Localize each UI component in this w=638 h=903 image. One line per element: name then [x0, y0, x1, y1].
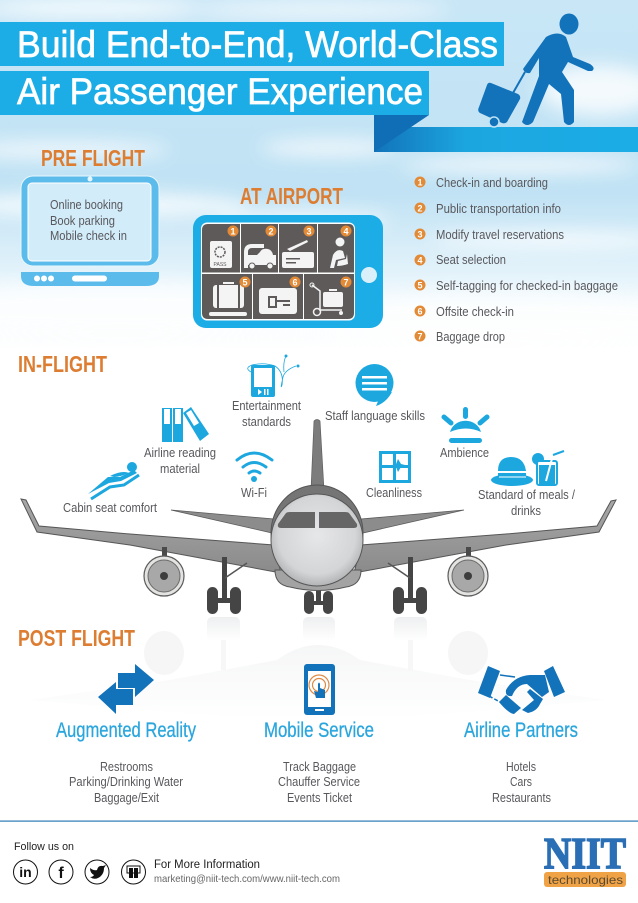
list: augmented reality [69, 759, 184, 805]
label: wi-fi: Wi-Fi [241, 485, 267, 500]
stabilizers [171, 510, 464, 533]
airport service list: Baggage drop [436, 329, 505, 344]
icon: passport [210, 241, 232, 268]
label: meals: drinks [511, 503, 541, 518]
heading: augmented reality: Augmented Reality [56, 719, 196, 742]
follow us label: Follow us on [14, 841, 74, 853]
icon: clean window [379, 451, 411, 483]
icon: traveller with suitcase [478, 14, 594, 127]
airport service list: 1 [417, 178, 423, 188]
airport service list [414, 175, 618, 344]
label: reading: material [160, 461, 200, 476]
fuselage [271, 485, 363, 581]
list: airline partners: Hotels [506, 759, 536, 774]
logo: NIIT technologies: technologies [548, 873, 623, 887]
list: augmented reality: Baggage/Exit [94, 790, 159, 805]
title: Air Passenger Experience [17, 71, 423, 112]
icon: linkedin: in [19, 864, 32, 880]
icon: slideshare [122, 860, 146, 884]
heading: post flight: POST FLIGHT [18, 625, 135, 651]
ghost plane reflection [30, 617, 605, 720]
list: augmented reality: Restrooms [100, 759, 153, 774]
title: Build End-to-End, World-Class [17, 24, 498, 65]
icon: ambience sun [444, 407, 487, 443]
icon: speech bubble [356, 364, 394, 406]
logo: NIIT technologies: NIIT [544, 829, 626, 878]
phone number badges: 3 [306, 226, 312, 236]
ribbon [374, 115, 638, 152]
phone number badges: 2 [268, 226, 274, 236]
panel: airport phone [193, 215, 383, 328]
contact information: marketing@niit-tech.com/www.niit-tech.com [154, 873, 340, 885]
label: reading [144, 445, 216, 476]
airport service list: Seat selection [436, 252, 506, 267]
icon: wi-fi [237, 453, 272, 482]
icon: books [162, 407, 209, 442]
label: entertainment [232, 398, 301, 429]
airport service list: Check-in and boarding [436, 175, 548, 190]
title [0, 22, 504, 115]
heading: in-flight: IN-FLIGHT [18, 351, 107, 377]
main wings [21, 499, 616, 573]
phone number badges: 6 [292, 278, 298, 288]
label: meals [478, 487, 575, 518]
airport service list: 6 [417, 306, 423, 316]
icon: baggage trolley [310, 283, 343, 316]
icon: burger and drink [491, 451, 564, 486]
phone number badges [228, 226, 352, 288]
icon: laptop panel: Mobile check in [50, 228, 127, 243]
icon: offsite key card [259, 288, 297, 314]
list: mobile service: Track Baggage [283, 759, 356, 774]
icon: baggage belt [209, 282, 247, 316]
list: airline partners: Restaurants [492, 790, 551, 805]
airport service list: 5 [417, 280, 423, 290]
heading: at airport: AT AIRPORT [240, 183, 343, 209]
heading: airline partners: Airline Partners [464, 719, 578, 742]
icon: augmented reality arrows [98, 664, 154, 714]
engines [144, 547, 488, 596]
heading: pre flight: PRE FLIGHT [41, 145, 145, 171]
label: entertainment: Entertainment [232, 398, 301, 413]
icon: handshake [478, 666, 565, 714]
airport service list: Modify travel reservations [436, 227, 564, 242]
airport service list: 3 [417, 230, 423, 240]
airport service list: Public transportation info [436, 201, 561, 216]
cockpit windows [278, 512, 357, 528]
icon: laptop panel: Book parking [50, 213, 115, 228]
label: entertainment: standards [242, 414, 291, 429]
phone number badges: 7 [343, 278, 349, 288]
phone number badges: 4 [343, 226, 349, 236]
airport service list: Offsite check-in [436, 304, 514, 319]
heading: mobile service: Mobile Service [264, 719, 374, 742]
list: mobile service [278, 759, 360, 805]
list: airline partners [492, 759, 551, 805]
icon: laptop panel: Online booking [50, 197, 123, 212]
phone number badges: 5 [242, 278, 248, 288]
label: reading: Airline reading [144, 445, 216, 460]
airport service list: 2 [417, 204, 423, 214]
belly fairing [275, 570, 361, 590]
label: staff language: Staff language skills [325, 408, 425, 423]
contact information: For More Information [154, 859, 260, 871]
list: mobile service: Chauffer Service [278, 774, 360, 789]
list: mobile service: Events Ticket [287, 790, 352, 805]
list: augmented reality: Parking/Drinking Water [69, 774, 184, 789]
icon: bus and car [244, 244, 276, 269]
airport service list: 4 [417, 256, 423, 266]
phone number badges: 1 [230, 226, 236, 236]
icon: mobile touch [304, 664, 335, 715]
icon: facebook: f [58, 865, 64, 882]
icon: tickets [282, 240, 314, 268]
label: seat comfort: Cabin seat comfort [63, 500, 157, 515]
icon: audio player [248, 354, 300, 397]
airport service list: 7 [417, 332, 423, 342]
contact information [154, 859, 340, 885]
icon: seated person [330, 238, 348, 268]
airplane [21, 420, 616, 614]
label: cleanliness: Cleanliness [366, 485, 422, 500]
icon: passport: PASS [214, 262, 227, 268]
icon: twitter [85, 860, 109, 884]
landing gear [207, 557, 427, 614]
label: meals: Standard of meals / [478, 487, 575, 502]
list: airline partners: Cars [510, 774, 532, 789]
icon: laptop panel [21, 176, 159, 286]
icon: reclined seat [88, 462, 139, 499]
tail fin [311, 420, 324, 490]
label: ambience: Ambience [440, 445, 489, 460]
sky background [0, 0, 638, 350]
social icons [14, 860, 146, 884]
